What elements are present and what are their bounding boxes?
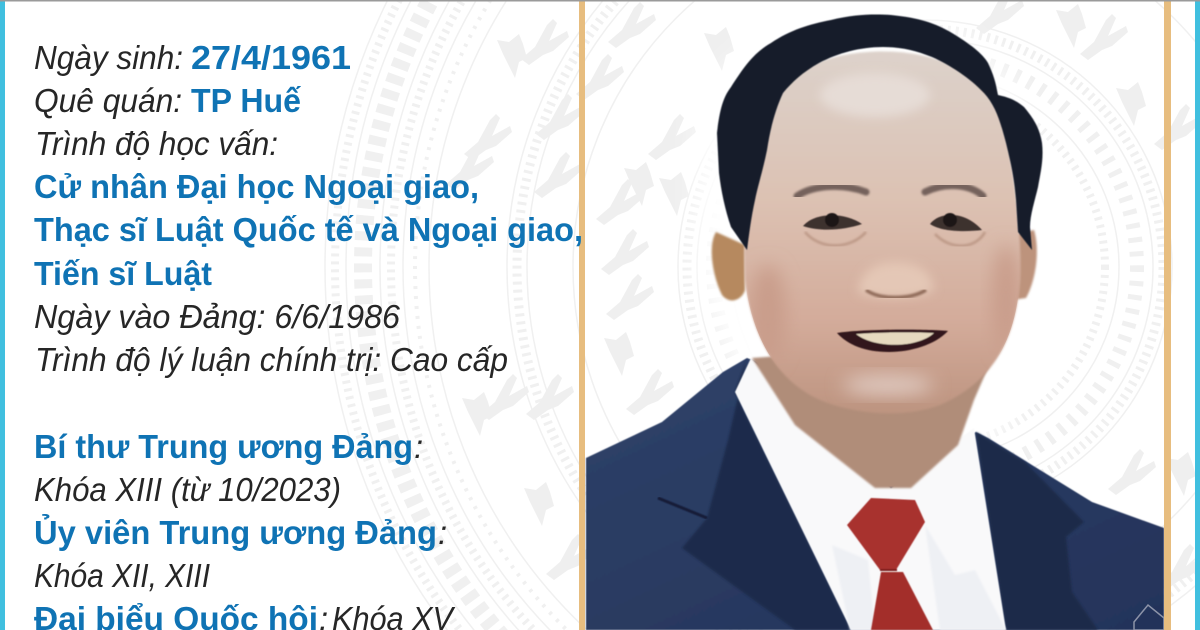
left cyan edge bar — [0, 0, 5, 630]
top grey edge — [0, 0, 1200, 2]
nose — [858, 262, 934, 298]
education details: Cử nhân Đại học Ngoại giao, — [34, 168, 479, 205]
education details: Thạc sĩ Luật Quốc tế và Ngoại giao, — [34, 211, 583, 248]
birth date: 27/4/1961 — [191, 39, 351, 76]
hometown — [34, 82, 302, 119]
central committee member — [34, 514, 447, 594]
drum creature motifs — [446, 0, 1200, 590]
biography text: personal details — [34, 39, 583, 378]
party join date: Ngày vào Đảng: 6/6/1986 — [34, 298, 401, 335]
white shirt and collar — [735, 358, 1006, 630]
smiling mouth — [837, 330, 948, 352]
neck — [752, 340, 1000, 488]
left ear — [712, 232, 745, 300]
central committee member: : — [438, 514, 447, 551]
hometown: TP Huế — [191, 82, 302, 119]
shirt shadows — [832, 525, 1006, 630]
political theory level: Trình độ lý luận chính trị: Cao cấp — [35, 341, 508, 378]
portrait photo — [586, 14, 1164, 630]
right cyan edge bar — [1195, 0, 1200, 630]
hair — [717, 15, 1043, 250]
eyebrows — [797, 186, 983, 196]
right ear — [1012, 230, 1037, 300]
hometown: Quê quán: — [34, 82, 182, 119]
lapel notch — [658, 498, 707, 518]
secretariat member: Bí thư Trung ương Đảng — [34, 428, 413, 465]
secretariat member — [34, 428, 423, 508]
education details: Tiến sĩ Luật — [34, 255, 212, 292]
eyes — [803, 213, 982, 231]
birth date: Ngày sinh: — [34, 39, 183, 76]
forehead highlight — [820, 73, 930, 117]
watermark hexagon logo — [1134, 605, 1164, 630]
right gold frame bar — [1164, 0, 1171, 630]
red tie — [847, 498, 933, 630]
biography text: party positions — [34, 428, 456, 630]
left gold frame bar — [579, 0, 585, 630]
secretariat member: : — [414, 428, 423, 465]
central committee member: Ủy viên Trung ương Đảng — [34, 514, 437, 551]
right lapel — [976, 432, 1098, 630]
education label: Trình độ học vấn: — [35, 125, 278, 162]
suit jacket — [586, 358, 1164, 630]
face — [744, 51, 1020, 413]
education details — [34, 168, 583, 292]
white halo around portrait — [700, 14, 1045, 440]
central committee member: Khóa XII, XIII — [34, 557, 210, 594]
left lapel — [682, 358, 851, 630]
bronze drum pattern background — [325, 0, 1200, 630]
cheek shading — [750, 245, 1020, 395]
national assembly deputy — [34, 600, 456, 630]
birth date — [34, 39, 351, 76]
under-eye bags — [805, 232, 985, 246]
secretariat member: Khóa XIII (từ 10/2023) — [34, 471, 341, 508]
